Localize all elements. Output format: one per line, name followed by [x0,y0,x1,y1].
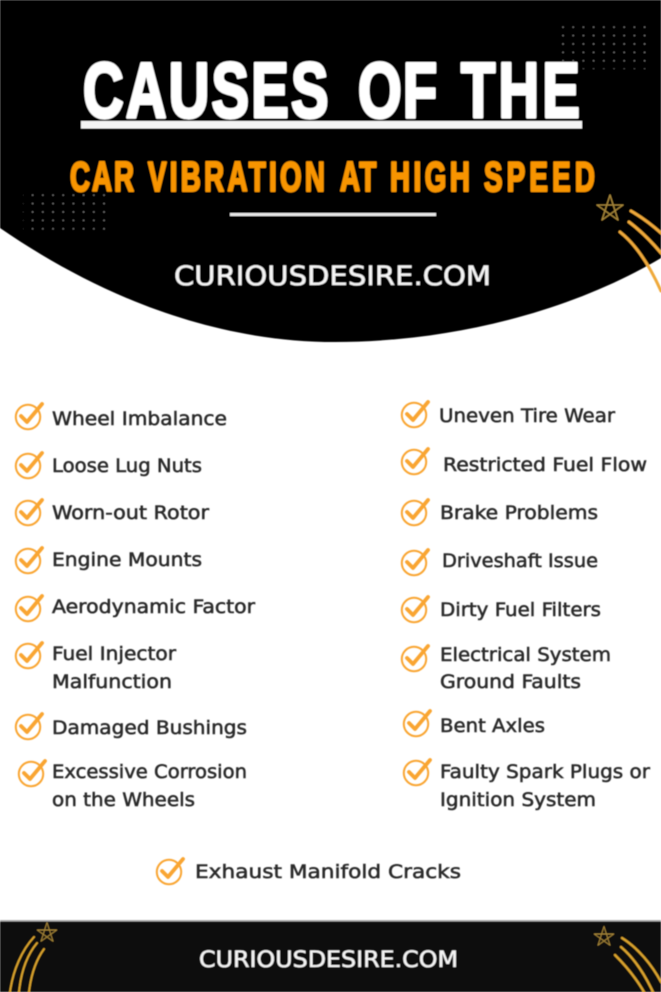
item: Faulty Spark Plugs or Ignition System [404,760,650,811]
item: Exhaust Manifold Cracks [157,859,461,884]
item: Engine Mounts [16,548,202,573]
item: Wheel Imbalance [16,404,227,430]
item: Dirty Fuel Filters: Dirty Fuel Filters [440,599,601,621]
item: Aerodynamic Factor [16,596,255,621]
website label: CURIOUSDESIRE.COM [174,261,491,292]
item: Excessive Corrosion on the Wheels [19,761,247,811]
item: Faulty Spark Plugs or Ignition System: Ignition System [440,789,596,811]
icon: top right star and comet trails [597,195,661,291]
left checklist [16,404,255,811]
dot pattern: top right [560,22,646,69]
item: Excessive Corrosion on the Wheels: on the Wheels [52,789,195,811]
item: Bent Axles [404,711,545,737]
item: Restricted Fuel Flow [402,449,647,476]
icon: footer left star and comet trails [10,922,57,992]
item: Electrical System Ground Faults: Ground Faults [440,671,581,693]
item: Bent Axles: Bent Axles [440,715,545,737]
item: Dirty Fuel Filters [402,597,601,622]
title underline [81,121,582,128]
item: Worn-out Rotor [16,500,209,525]
item: Exhaust Manifold Cracks: Exhaust Manifold Cracks [195,861,461,883]
title: CAUSES [83,47,329,134]
subtitle: AT [340,153,377,200]
subtitle: VIBRATION [148,153,325,200]
item: Damaged Bushings [16,714,247,739]
title: OF [358,47,437,134]
item: Brake Problems [402,500,598,525]
subtitle: HIGH [390,153,470,200]
item: Faulty Spark Plugs or Ignition System: Faulty Spark Plugs or [440,761,650,783]
subtitle: SPEED [484,153,595,200]
footer bar [0,920,661,992]
item: Loose Lug Nuts [16,453,202,478]
item: Fuel Injector Malfunction: Fuel Injector [52,643,176,665]
item: Fuel Injector Malfunction: Malfunction [52,671,172,693]
footer website label: CURIOUSDESIRE.COM [199,948,458,973]
item: Brake Problems: Brake Problems [440,502,598,524]
right checklist [402,402,650,811]
icon: footer right star and comet trails [594,926,661,992]
item: Engine Mounts: Engine Mounts [52,549,202,571]
dot pattern: left [23,192,105,236]
header: black curved panel [0,0,661,342]
item: Fuel Injector Malfunction [16,643,176,693]
item: Uneven Tire Wear [402,402,615,427]
title: THE [461,47,580,134]
subtitle: CAR [70,153,134,200]
item: Wheel Imbalance: Wheel Imbalance [52,408,227,430]
item: Electrical System Ground Faults [402,644,611,693]
item: Damaged Bushings: Damaged Bushings [52,717,247,739]
divider line [230,213,436,216]
item: Aerodynamic Factor: Aerodynamic Factor [52,596,255,618]
item: Driveshaft Issue: Driveshaft Issue [442,550,598,572]
subtitle [70,153,595,200]
item: Restricted Fuel Flow: Restricted Fuel Flow [443,454,647,476]
item: Uneven Tire Wear: Uneven Tire Wear [439,405,615,427]
item: Worn-out Rotor: Worn-out Rotor [52,502,209,524]
title [83,47,580,134]
item: Electrical System Ground Faults: Electrical System [440,644,611,666]
item: Driveshaft Issue [402,550,598,575]
item: Loose Lug Nuts: Loose Lug Nuts [52,455,202,477]
item: Excessive Corrosion on the Wheels: Excessive Corrosion [52,761,247,783]
